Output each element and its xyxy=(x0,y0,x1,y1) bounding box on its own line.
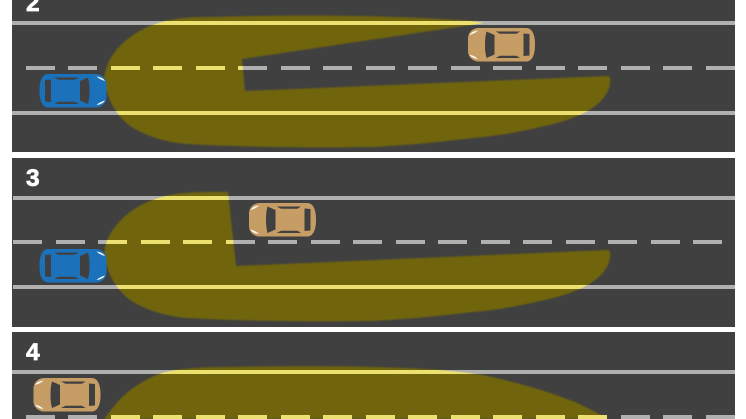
panel: scene 2 xyxy=(12,0,735,152)
blue car xyxy=(40,249,106,282)
road markings xyxy=(12,370,735,419)
headlight beam xyxy=(104,366,607,419)
step number 3: 3 xyxy=(26,165,40,192)
tan oncoming car xyxy=(249,203,316,236)
headlight beam with vertical cut-off xyxy=(104,192,610,321)
road markings xyxy=(13,196,735,289)
tan car xyxy=(34,378,100,412)
blue car xyxy=(40,74,106,108)
panel: scene 4 xyxy=(12,332,735,419)
road markings xyxy=(12,21,735,115)
step number 4: 4 xyxy=(26,339,40,366)
panel: scene 3 xyxy=(12,158,735,327)
tan oncoming car xyxy=(468,28,535,62)
headlight beam with cut-out xyxy=(104,16,610,147)
